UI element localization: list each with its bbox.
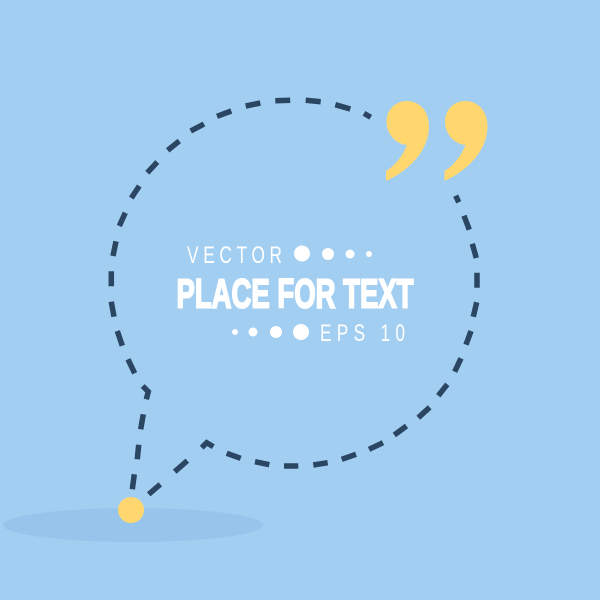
ground shadow: [3, 508, 263, 542]
yellow anchor dot: [118, 497, 144, 523]
icon: quotation marks: [386, 101, 488, 181]
top decorative dots: [294, 246, 372, 262]
bottom decorative dots: [232, 324, 309, 340]
text: VECTOR: VECTOR: [187, 242, 282, 269]
text: EPS 10: EPS 10: [320, 320, 405, 347]
heading: PLACE FOR TEXT: PLACE FOR TEXT: [176, 270, 414, 316]
dashed speech bubble outline: [111, 100, 477, 494]
